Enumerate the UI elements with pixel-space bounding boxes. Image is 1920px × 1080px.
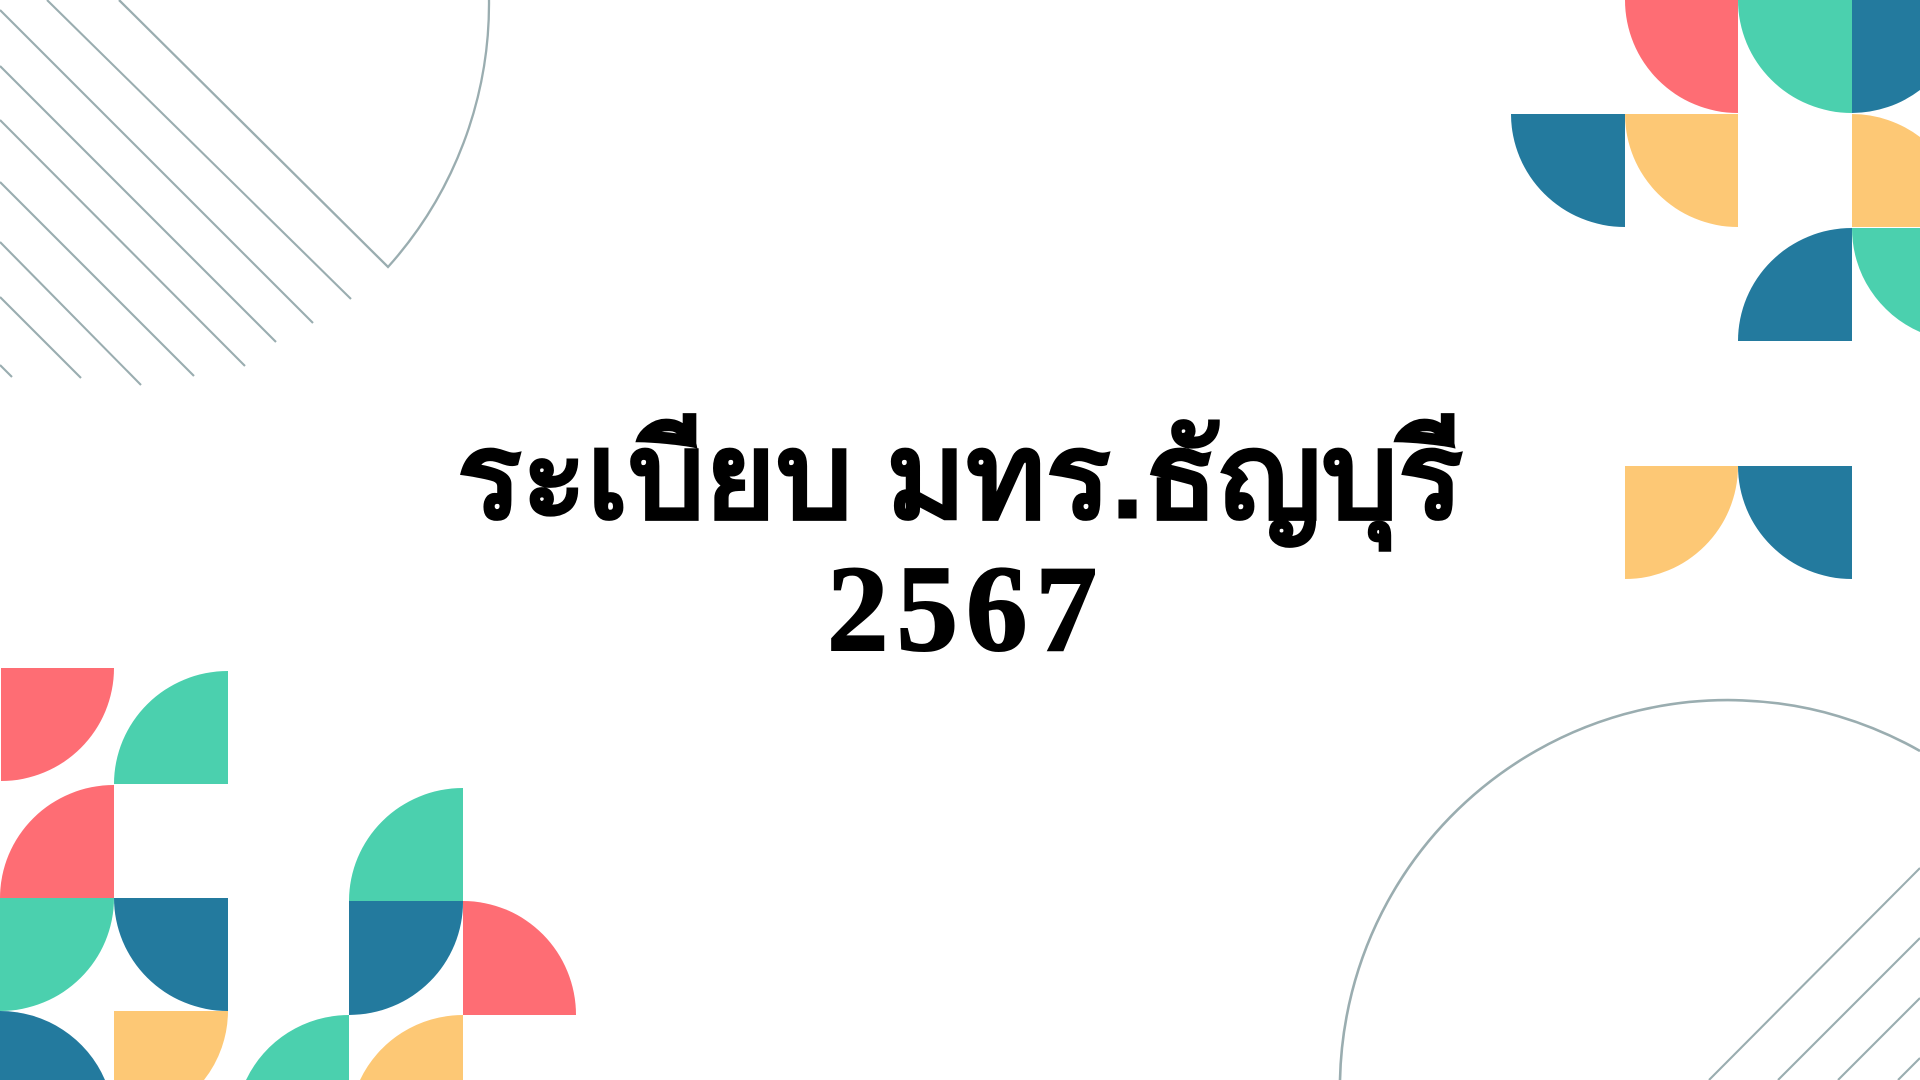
title [457, 408, 1463, 677]
line art: top-left arc with diagonal lines [0, 0, 489, 385]
shapes: bottom-centre quarter-circle cluster [246, 788, 576, 1080]
line art: bottom-right circle with diagonal lines [1340, 700, 1920, 1080]
title line 2: 2567 [827, 540, 1105, 677]
shapes: right-middle quarter-circle pair [1625, 466, 1852, 579]
shapes: top-right quarter-circle cluster [1511, 0, 1920, 341]
title line 1: ระเบียบ มทร.ธัญบุรี [457, 408, 1463, 544]
shapes: bottom-left quarter-circle cluster [0, 668, 228, 1080]
